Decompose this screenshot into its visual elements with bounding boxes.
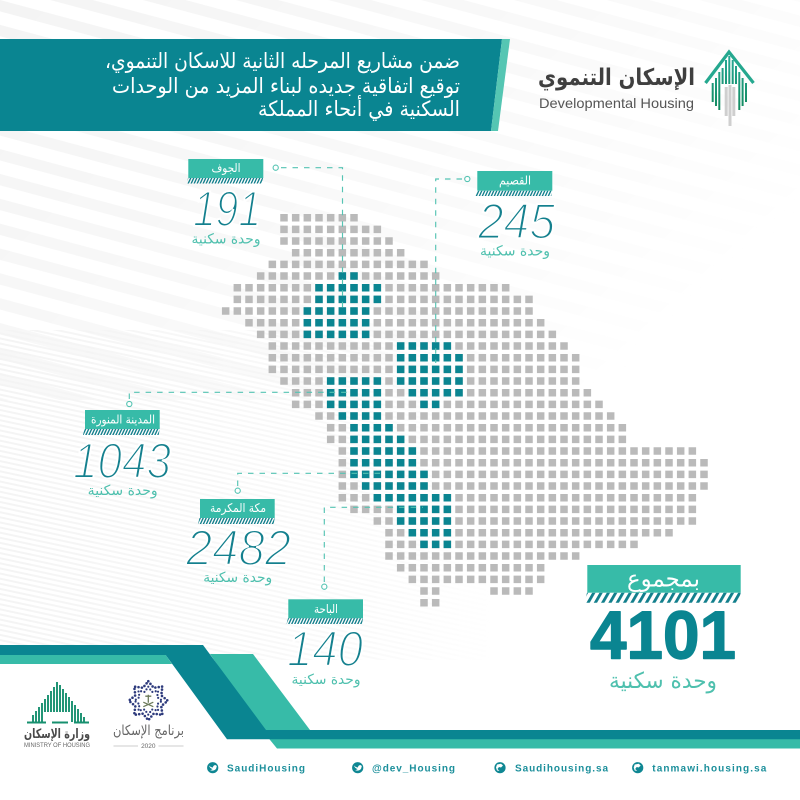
callout: Mecca 2482: مكة المكرمة bbox=[210, 501, 266, 516]
header banner bbox=[0, 39, 510, 131]
ministry name english: MINISTRY OF HOUSING bbox=[24, 743, 90, 749]
logo: Housing Program 2020 bbox=[113, 681, 184, 750]
logo wordmark arabic: الإسكان التنموي bbox=[538, 65, 695, 91]
text: Saudihousing.sa: Saudihousing.sa bbox=[515, 764, 608, 774]
callout: Al Baha 140 bbox=[286, 599, 363, 688]
bottom ribbons bbox=[0, 645, 800, 748]
text: SaudiHousing: SaudiHousing bbox=[227, 764, 305, 774]
connector: Qassim bbox=[436, 176, 470, 363]
callout: Qassim 245: وحدة سكنية bbox=[480, 244, 550, 260]
ministry name arabic: وزارة الإسكان bbox=[24, 727, 90, 742]
grey base squares bbox=[222, 218, 708, 603]
highlighted region: Al Jouf bbox=[304, 276, 381, 334]
callout: Al Jouf 191 bbox=[186, 159, 263, 248]
icon: twitter bbox=[207, 762, 218, 773]
text: tanmawi.housing.sa: tanmawi.housing.sa bbox=[652, 764, 767, 774]
total number: 4101 bbox=[590, 598, 736, 674]
callout: Mecca 2482: وحدة سكنية bbox=[203, 570, 272, 586]
callout: Al Baha 140: وحدة سكنية bbox=[292, 672, 360, 688]
logo: Developmental Housing bbox=[538, 52, 754, 126]
banner title: توقيع اتفاقية جديده لبناء المزيد من الوحدات bbox=[112, 74, 460, 98]
callout: Al Baha 140: 140 bbox=[287, 621, 363, 677]
callout: Qassim 245 bbox=[476, 171, 555, 260]
callout: Medina 1043 bbox=[73, 410, 171, 499]
callout: Al Baha 140: الباحة bbox=[314, 602, 338, 616]
program year: 2020 bbox=[141, 743, 156, 750]
icon: globe bbox=[632, 762, 643, 773]
total unit label: وحدة سكنية bbox=[609, 669, 717, 694]
map of Saudi Arabia as dot grid bbox=[222, 218, 708, 603]
callout: Qassim 245: القصيم bbox=[499, 174, 531, 188]
highlighted region: Medina bbox=[327, 381, 393, 428]
icon: house arrow bbox=[706, 52, 754, 126]
icon: twitter bbox=[352, 762, 363, 773]
total tag bbox=[584, 565, 741, 603]
program name: برنامج الإسكان bbox=[113, 723, 184, 739]
callout: Medina 1043: 1043 bbox=[73, 433, 171, 489]
connector: Medina bbox=[127, 392, 350, 407]
icon: globe bbox=[494, 762, 506, 773]
callout: Mecca 2482: 2482 bbox=[185, 520, 291, 576]
banner title: ضمن مشاريع المرحله الثانية للاسكان التنموي، bbox=[105, 49, 460, 73]
logo: Ministry of Housing bbox=[24, 682, 90, 749]
total: 4101 housing units bbox=[584, 565, 741, 694]
icon: ministry emblem bbox=[27, 682, 89, 722]
connector: Mecca bbox=[235, 473, 386, 493]
connector: Al Jouf bbox=[273, 165, 342, 312]
callout: Al Jouf 191: وحدة سكنية bbox=[192, 232, 260, 248]
callout: Qassim 245: 245 bbox=[477, 194, 555, 250]
footer links bbox=[207, 762, 767, 774]
callout: Mecca 2482 bbox=[185, 499, 291, 586]
highlighted region: Mecca bbox=[350, 439, 428, 486]
connector: Al Baha bbox=[322, 507, 423, 589]
icon: dotted star bbox=[129, 681, 168, 720]
banner title: السكنية في أنحاء المملكة bbox=[258, 95, 460, 121]
logo wordmark english: Developmental Housing bbox=[539, 95, 694, 111]
callout: Al Jouf 191: الجوف bbox=[212, 161, 240, 176]
banner title bbox=[105, 49, 460, 121]
highlighted region: Qassim bbox=[397, 346, 463, 404]
text: dev_Housing: @dev_Housing bbox=[372, 764, 455, 774]
callout: Al Jouf 191: 191 bbox=[193, 181, 261, 237]
total tag: بمجموع bbox=[627, 566, 700, 592]
callout: Medina 1043: المدينة المنورة bbox=[91, 412, 155, 428]
highlighted region: Al Baha bbox=[374, 498, 451, 544]
callout: Medina 1043: وحدة سكنية bbox=[88, 483, 158, 499]
